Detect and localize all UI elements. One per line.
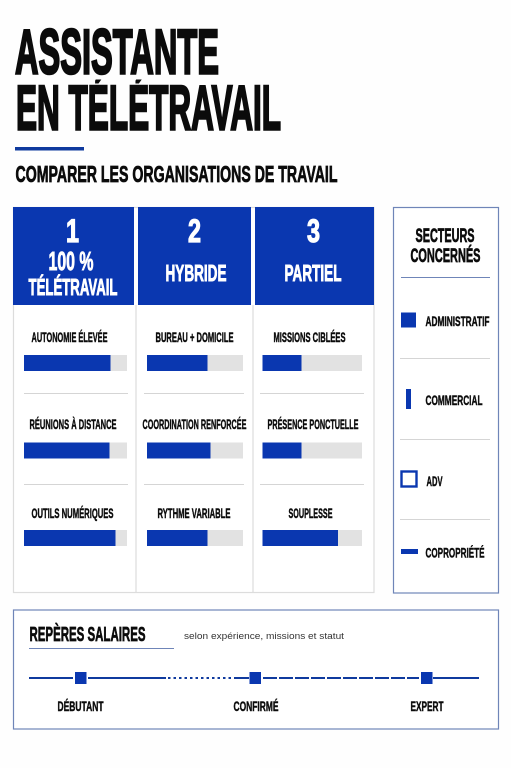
panel: repères salaires <box>14 610 498 729</box>
panel heading <box>410 225 480 267</box>
column 2 header: 2 <box>188 213 201 249</box>
legend: administratif <box>401 312 490 329</box>
timeline labels: EXPERT <box>410 699 444 714</box>
criterion: présence ponctuelle <box>262 417 362 458</box>
criterion: présence ponctuelle: PRÉSENCE PONCTUELLE <box>268 417 358 432</box>
criterion: coordination renforcée: COORDINATION RENFORCÉE <box>142 417 246 432</box>
panel: secteurs concernés <box>394 208 498 593</box>
criterion: coordination renforcée <box>142 417 246 458</box>
criterion: autonomie élevée: AUTONOMIE ÉLEVÉE <box>32 330 108 345</box>
column 2: hybride <box>138 207 251 546</box>
column 3 header: PARTIEL <box>284 260 342 286</box>
criterion: bureau + domicile: BUREAU + DOMICILE <box>156 330 234 345</box>
timeline labels <box>58 699 444 714</box>
timeline labels: DÉBUTANT <box>58 699 104 714</box>
column 2 header: HYBRIDE <box>166 260 226 286</box>
criterion: rythme variable <box>147 506 243 546</box>
column 1 header: 1 <box>66 213 79 249</box>
criterion: souplesse: SOUPLESSE <box>288 506 332 521</box>
title <box>14 28 281 131</box>
column 1: 100 % télétravail <box>13 207 134 546</box>
panel: comparison table <box>13 207 374 592</box>
panel note: selon expérience, missions et statut <box>184 631 344 642</box>
column 1 header <box>13 207 134 305</box>
column 3: partiel <box>255 207 374 546</box>
legend: commercial <box>406 389 482 409</box>
column 1 header: TÉLÉTRAVAIL <box>28 273 118 300</box>
title accent rule <box>15 147 84 150</box>
legend: ADV: ADV <box>426 474 442 489</box>
column 1 header: 100 % <box>48 246 94 276</box>
legend: ADV <box>402 472 442 489</box>
criterion: bureau + domicile <box>147 330 243 371</box>
criterion: missions ciblées <box>262 330 362 371</box>
criterion: rythme variable: RYTHME VARIABLE <box>158 506 230 521</box>
column 3 header <box>255 207 374 305</box>
criterion: souplesse <box>262 506 362 546</box>
title: ASSISTANTE <box>15 18 219 88</box>
criterion: réunions à distance: RÉUNIONS À DISTANCE <box>30 417 116 432</box>
criterion: outils numériques: OUTILS NUMÉRIQUES <box>32 506 114 521</box>
column 2 header <box>138 207 251 305</box>
criterion: autonomie élevée <box>24 330 127 371</box>
criterion: missions ciblées: MISSIONS CIBLÉES <box>274 330 346 345</box>
salary timeline <box>29 672 479 684</box>
criterion: réunions à distance <box>24 417 127 458</box>
panel heading: REPÈRES SALAIRES <box>30 623 146 646</box>
column 3 header: 3 <box>307 213 320 249</box>
criterion: outils numériques <box>24 506 127 546</box>
legend: copropriété <box>401 546 484 560</box>
timeline labels: CONFIRMÉ <box>234 699 278 714</box>
